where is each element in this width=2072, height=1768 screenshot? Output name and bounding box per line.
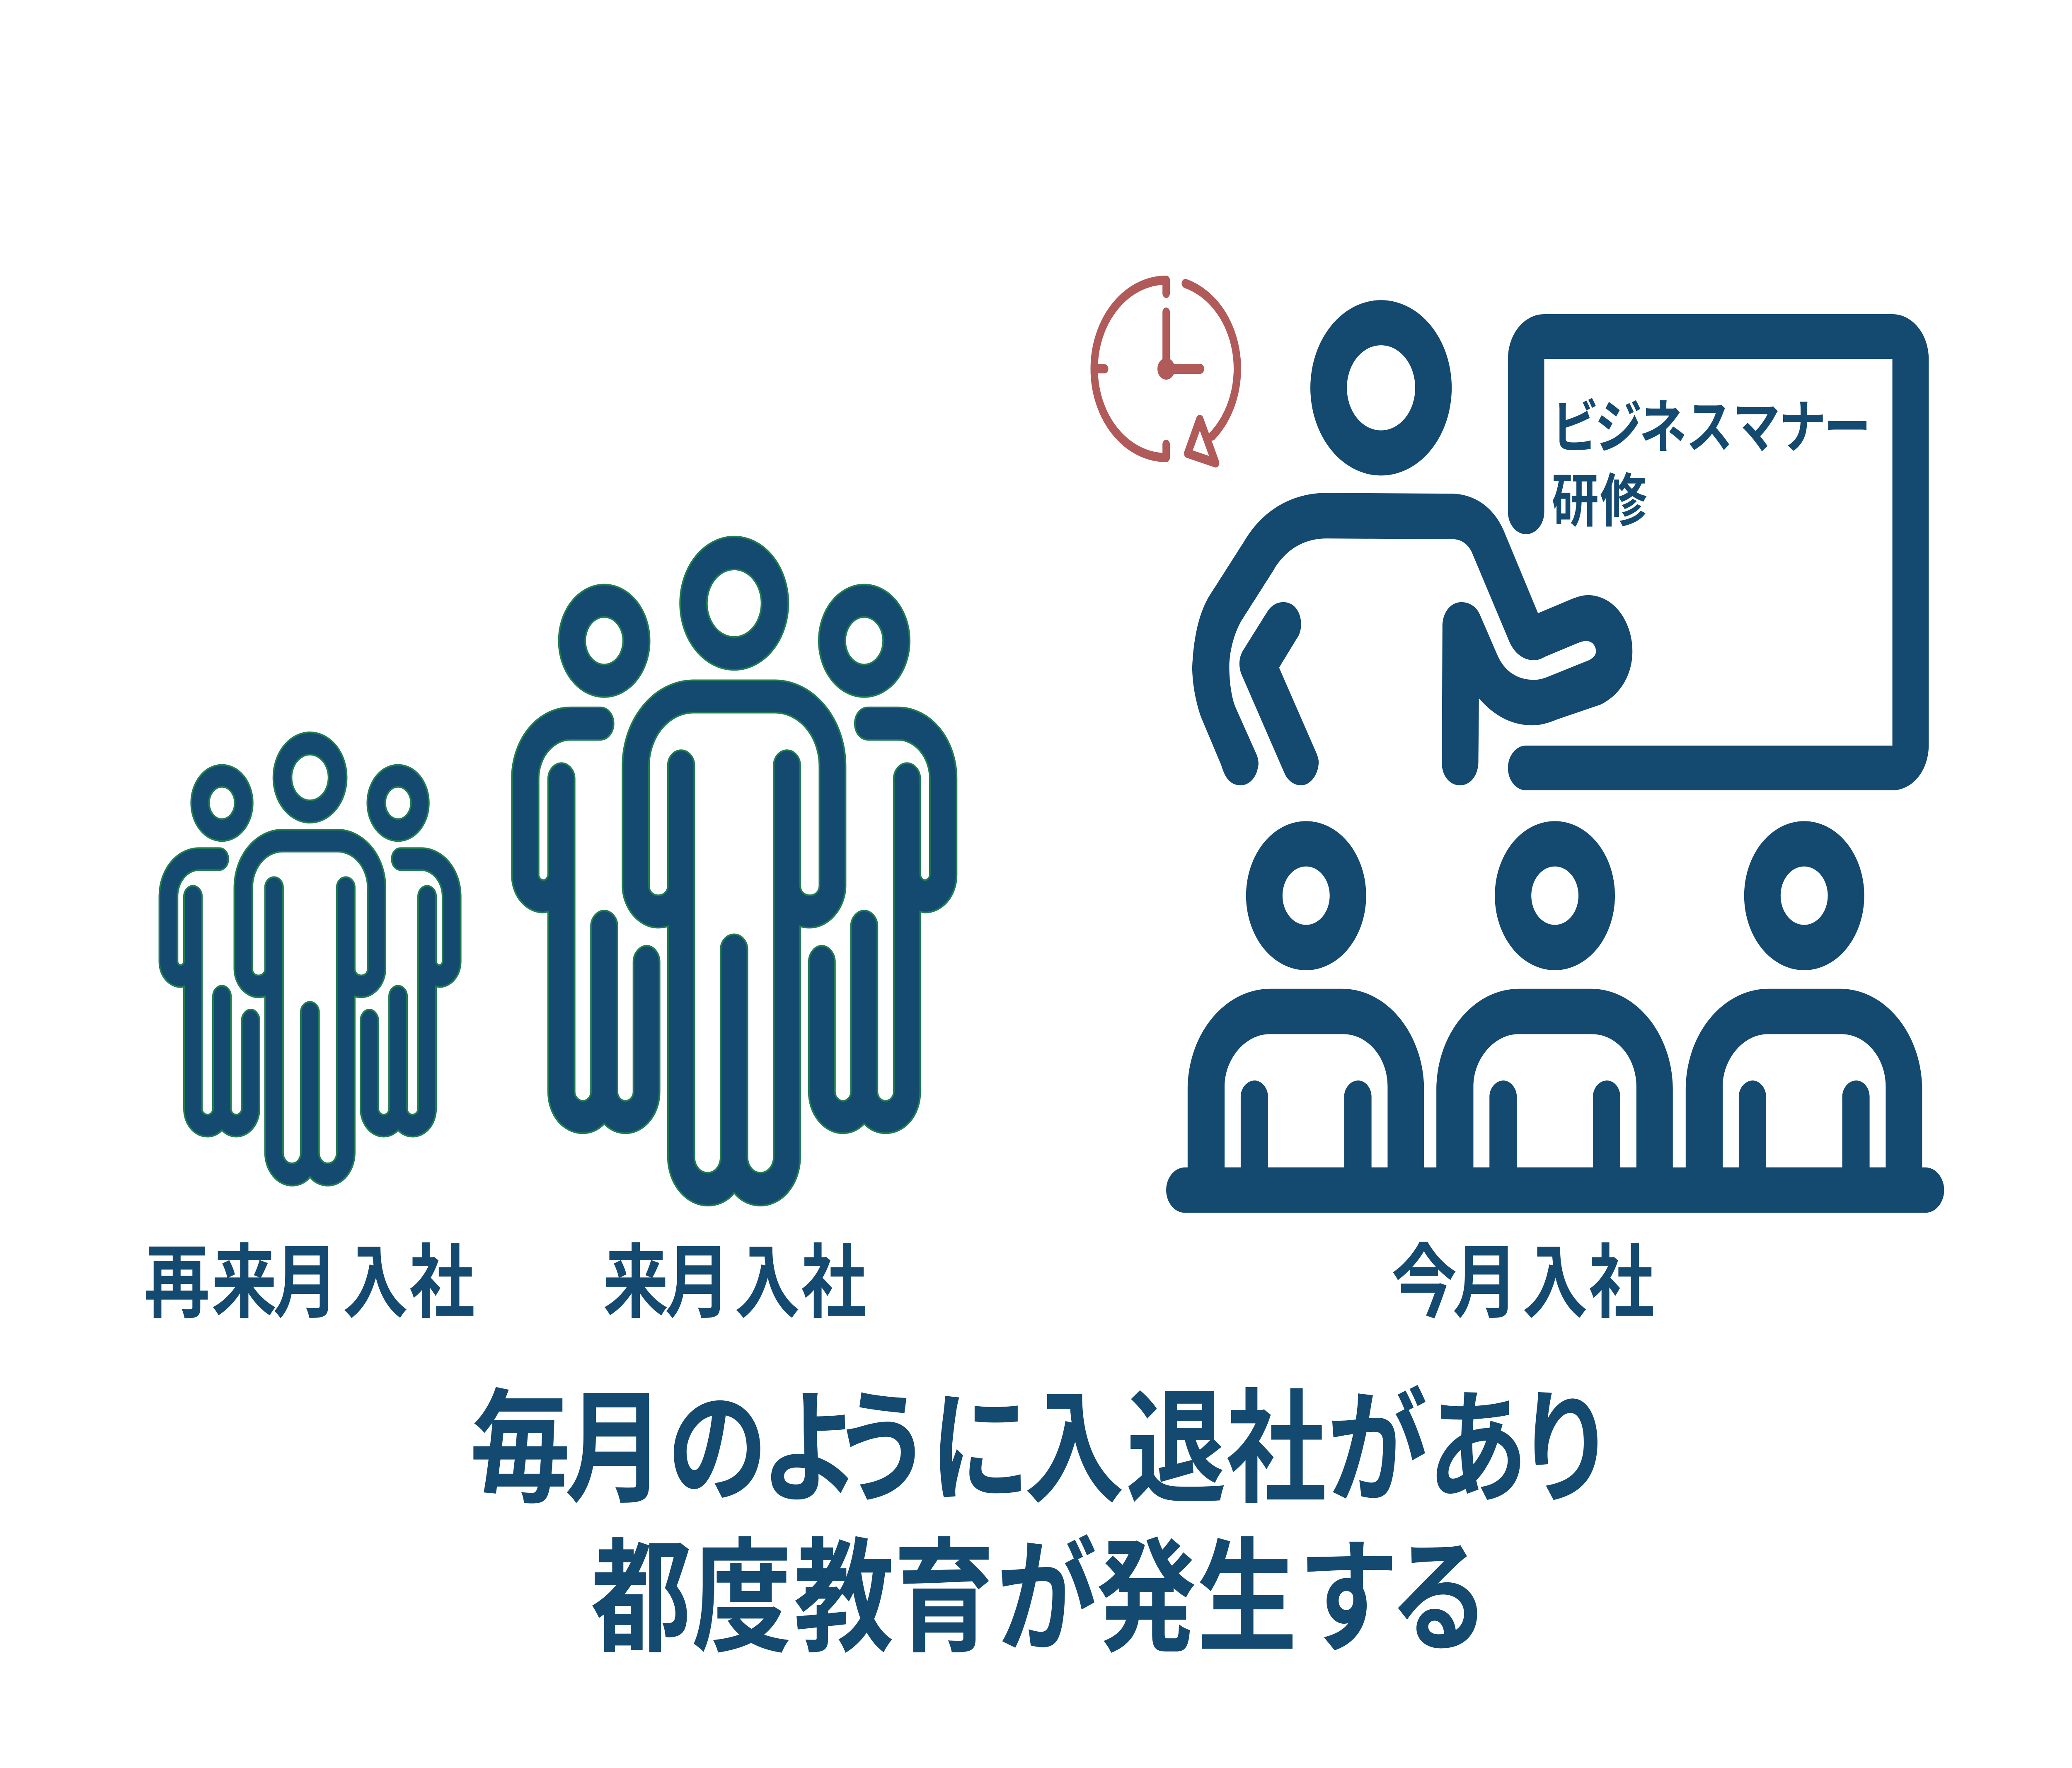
icon: whiteboard — [1526, 337, 1910, 768]
icon: group of people joining the month after next — [160, 732, 461, 1186]
icon: clock — [1094, 280, 1237, 463]
title — [470, 1380, 1616, 1668]
icon: seated trainees at table — [1166, 821, 1944, 1213]
icon: group of people joining next month — [512, 537, 956, 1206]
label: next month: 来月入社 — [603, 1238, 867, 1328]
whiteboard text: ビジネスマナー — [1552, 396, 1871, 460]
whiteboard text: 研修 — [1552, 470, 1647, 534]
label: month after next: 再来月入社 — [144, 1238, 475, 1328]
title: 都度教育が発生する — [591, 1529, 1489, 1668]
icon: instructor — [1192, 300, 1632, 785]
whiteboard text — [1552, 396, 1871, 534]
title: 毎月のように入退社があり — [470, 1380, 1616, 1519]
label: this month: 今月入社 — [1392, 1238, 1654, 1328]
